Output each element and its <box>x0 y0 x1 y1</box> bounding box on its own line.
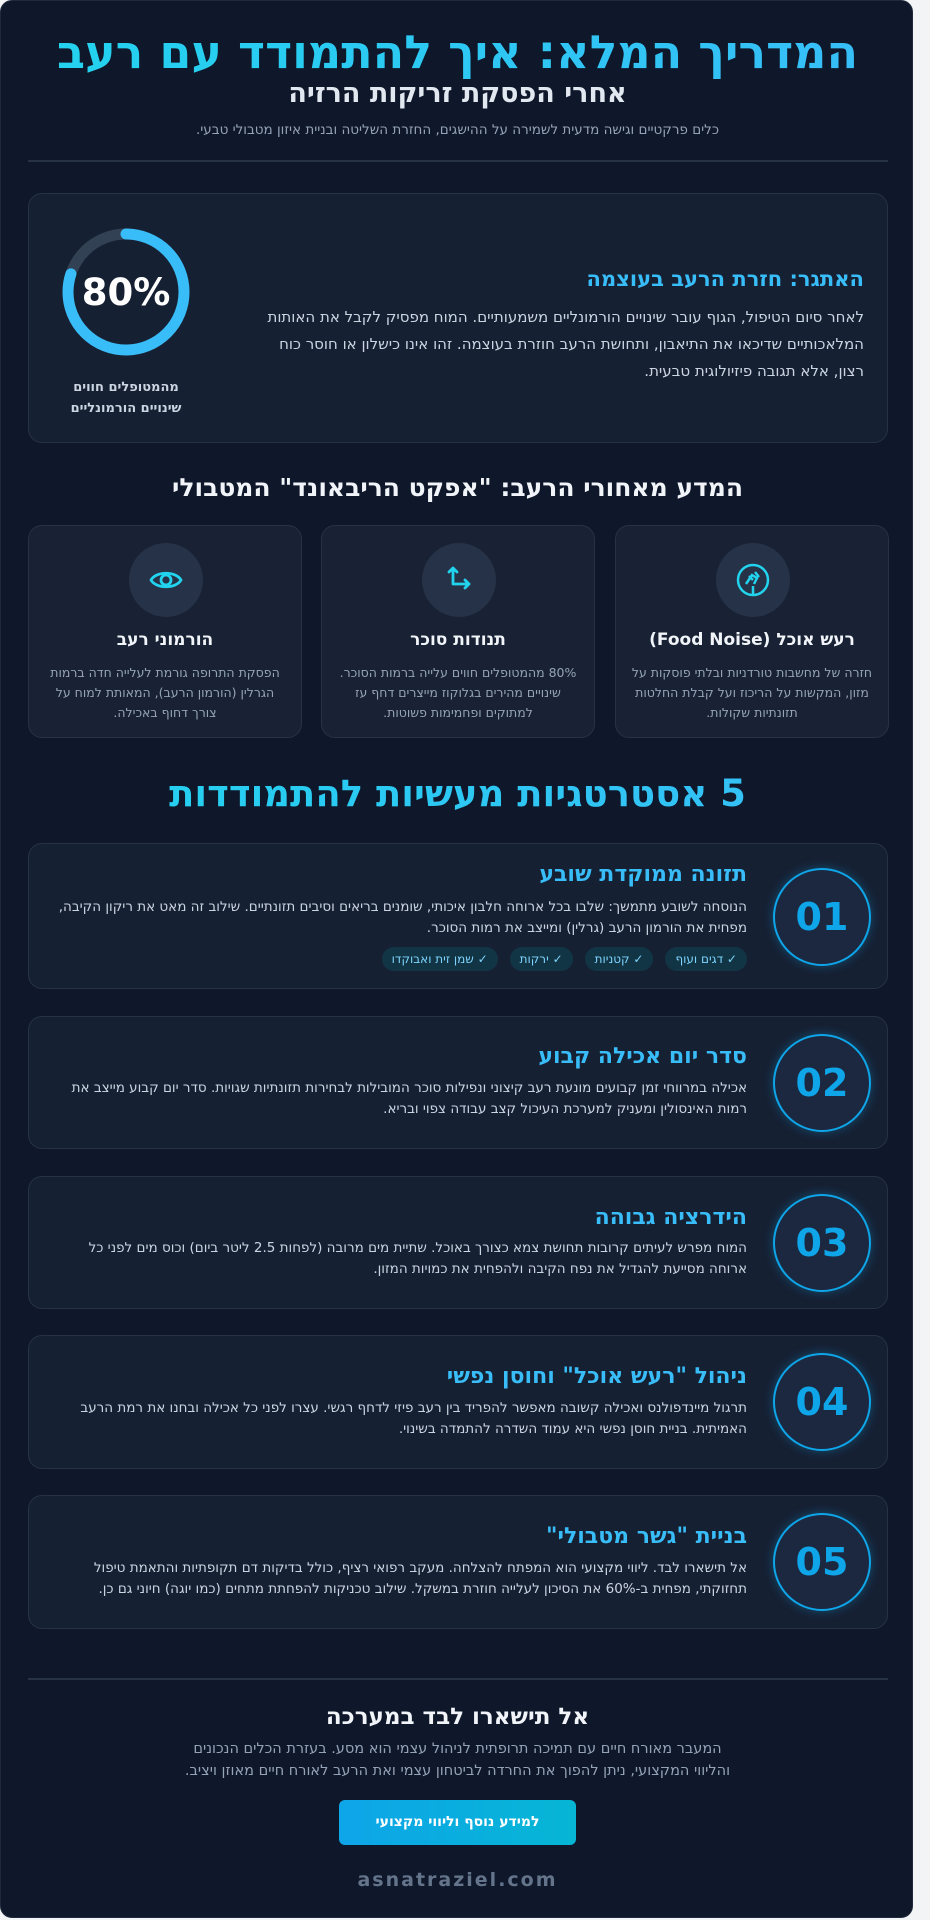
strategy heading: הידרציה גבוהה <box>595 1205 747 1230</box>
ring caption <box>71 380 182 416</box>
section heading: strategies <box>1 769 914 819</box>
tags: ✓ ירקות <box>520 952 563 966</box>
card title: תנודות סוכר <box>410 630 506 650</box>
ring caption: שינויים הורמונליים <box>71 401 181 416</box>
strategy heading: ניהול "רעש אוכל" וחוסן נפשי <box>447 1364 747 1389</box>
website: asnatraziel.com <box>357 1869 558 1891</box>
card title: הורמוני רעב <box>117 630 213 650</box>
icon: eye <box>129 543 203 617</box>
number badge: 02 <box>796 1061 848 1105</box>
strategy 01 <box>28 843 888 989</box>
CTA button: למידע נוסף וליווי מקצועי <box>376 1814 539 1830</box>
footer text <box>185 1741 730 1779</box>
footer heading: אל תישארו לבד במערכה <box>326 1704 589 1730</box>
number badge <box>773 1353 871 1451</box>
number badge <box>773 868 871 966</box>
card text: חזרה של מחשבות טורדניות ובלתי פוסקות על מזון, המקשות על הריכוז ועל קבלת החלטות תזונתיות שקולות. <box>632 665 872 720</box>
challenge heading: האתגר: חזרת הרעב בעוצמה <box>587 267 864 291</box>
strategy heading: תזונה ממוקדת שובע <box>539 862 747 887</box>
number badge: 03 <box>796 1221 848 1265</box>
card text: הפסקת התרופה גורמת לעלייה חדה ברמות הגרלין (הורמון הרעב), המאותת למוח על צורך דחוף באכילה. <box>50 665 280 720</box>
ring caption: מהמטופלים חווים <box>73 380 179 395</box>
strategy 02 <box>28 1016 888 1149</box>
strategy 03 <box>28 1176 888 1309</box>
footer text: והליווי המקצועי, ניתן להפוך את החרדה לביטחון עצמי ואת הרעב לאורח חיים מאוזן ויציב. <box>185 1763 730 1779</box>
icon: brain <box>716 543 790 617</box>
section heading: strategies: 5 אסטרטגיות מעשיות להתמודדות <box>169 772 746 815</box>
strategy heading: בניית "גשר מטבולי" <box>546 1524 747 1549</box>
strategy 05 <box>28 1495 888 1629</box>
number badge <box>773 1513 871 1611</box>
card: sugar <box>321 525 595 738</box>
strategy heading: סדר יום אכילה קבוע <box>538 1044 747 1069</box>
icon: arrows <box>422 543 496 617</box>
ring chart 80%: 80% <box>82 271 170 314</box>
card: food noise <box>615 525 889 738</box>
tags: ✓ שמן זית ואבוקדו <box>392 952 488 966</box>
subtitle: אחרי הפסקת זריקות הרזיה <box>288 78 627 109</box>
title: המדריך המלא: איך להתמודד עם רעב <box>57 25 858 79</box>
tagline: כלים פרקטיים וגישה מדעית לשמירה על ההישגים, החזרת השליטה ובניית איזון מטבולי טבעי. <box>196 122 719 138</box>
number badge <box>773 1034 871 1132</box>
strategy text: אל תישארו לבד. ליווי מקצועי הוא המפתח להצלחה. מעקב רפואי רציף, כולל בדיקות דם תקופתיות והתאמת טיפול תחזוקתי, מפחית ב-60% את הסיכון לעלייה חוזרת במשקל. שילוב טכניקות להפחתת מתחים (כמו יוגה) חיוני גם כן. <box>94 1560 747 1597</box>
card: hormones <box>28 525 302 738</box>
strategy text: אכילה במרווחי זמן קבועים מונעת רעב קיצוני ונפילות סוכר המובילות לבחירות תזונתיות שגויות. סדר יום קבוע מייצב את רמות האינסולין ומעניק למערכת העיכול קצב עבודה צפוי ובריא. <box>72 1080 747 1117</box>
number badge: 01 <box>796 895 848 939</box>
section heading: science: המדע מאחורי הרעב: "אפקט הריבאונד" המטבולי <box>172 473 743 502</box>
number badge: 05 <box>796 1540 848 1584</box>
strategy text: המוח מפרש לעיתים קרובות תחושת צמא כצורך באוכל. שתיית מים מרובה (לפחות 2.5 ליטר ביום) וכוס מים לפני כל ארוחה מסייעת להגדיל את נפח הקיבה ולהפחית את כמויות המזון. <box>89 1240 747 1277</box>
number badge <box>773 1194 871 1292</box>
footer text: המעבר מאורח חיים עם תמיכה תרופתית לניהול עצמי הוא מסע. בעזרת הכלים הנכונים <box>193 1741 722 1757</box>
tags: ✓ קטניות <box>595 952 643 966</box>
tags: ✓ דגים ועוף <box>675 952 737 966</box>
challenge text: לאחר סיום הטיפול, הגוף עובר שינויים הורמונליים משמעותיים. המוח מפסיק לקבל את האותות המלאכותיים שדיכאו את התיאבון, ותחושת הרעב חוזרת בעוצמה. זהו אינו כישלון או חוסר כוח רצון, אלא תגובה פיזיולוגית טבעית. <box>267 308 864 380</box>
panel: challenge <box>28 193 888 443</box>
ring chart 80% <box>62 228 190 356</box>
card title: רעש אוכל (Food Noise) <box>649 630 855 650</box>
tags <box>382 947 747 971</box>
strategy 04 <box>28 1335 888 1469</box>
strategy text: הנוסחה לשובע מתמשך: שלבו בכל ארוחה חלבון איכותי, שומנים בריאים וסיבים תזונתיים. שילוב זה מאט את ריקון הקיבה, מפחית את הורמון הרעב (גרלין) ומייצב את רמות הסוכר. <box>59 899 747 936</box>
card text: 80% מהמטופלים חווים עלייה ברמות הסוכר. שינויים מהירים בגלוקוז מייצרים דחף עז למתוקים ופחמימות פשוטות. <box>340 665 576 720</box>
CTA button <box>339 1800 576 1845</box>
strategy text: תרגול מיינדפולנס ואכילה קשובה מאפשר להפריד בין רעב פיזי לדחף רגשי. עצרו לפני כל אכילה ובחנו את רמת הרעב האמיתית. בניית חוסן נפשי היא עמוד השדרה להתמדה בשינוי. <box>80 1400 747 1437</box>
number badge: 04 <box>796 1380 848 1424</box>
